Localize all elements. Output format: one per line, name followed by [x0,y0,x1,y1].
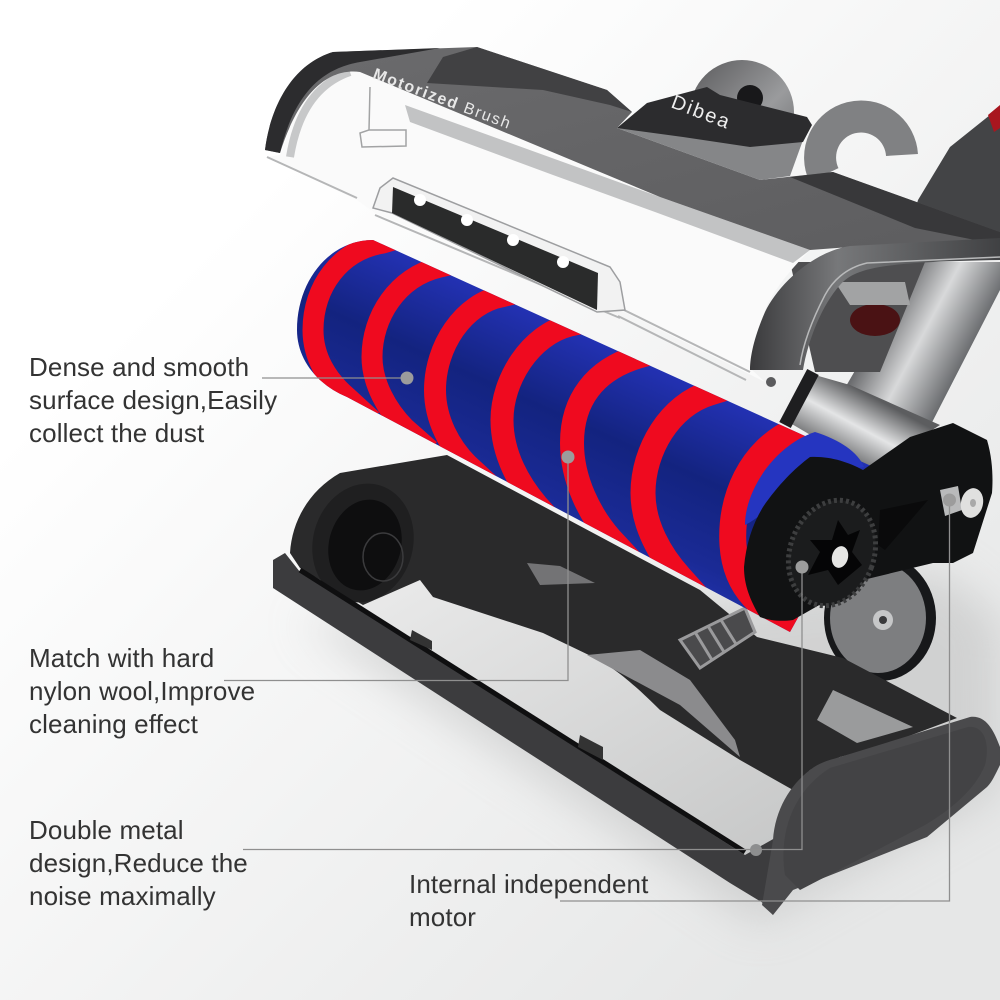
callout: double metal [29,815,248,911]
logo plate [617,87,812,147]
dark right panel [790,172,1000,245]
motor cylinder [785,372,940,470]
callout: double metal: noise maximally [29,881,216,911]
callout: dense surface: collect the dust [29,418,204,448]
arch of cover [290,72,350,157]
internal mechanism behind cover [790,262,925,372]
window rail lines [267,157,750,380]
vacuum tube upper [905,105,1000,245]
leader lines [224,378,950,901]
shiny reflections on tray [527,563,913,757]
callout: dense surface [29,352,277,448]
callout: double metal: design,Reduce the [29,848,248,878]
soft floor shadow [300,570,1000,925]
roller [297,240,870,632]
joint hook [820,116,902,175]
callout: nylon wool [29,643,255,739]
gear [774,488,890,618]
logo plate: Dibea [668,91,734,134]
tray inner body [290,455,957,790]
front arm of cover [750,238,1000,387]
callout: nylon wool: Match with hard [29,643,214,673]
right end cap of tray [762,717,1000,915]
LED strip [373,178,625,312]
clip inside window [360,87,406,147]
callout: double metal: Double metal [29,815,184,845]
callout: dense surface: surface design,Easily [29,385,277,415]
leader dots [400,372,956,574]
wiring seen through the cover [405,105,810,263]
callout: nylon wool: cleaning effect [29,709,198,739]
top cover body band [265,47,1000,250]
roller end fold blue [745,432,864,525]
black end cap arm [744,423,992,621]
callout: nylon wool: nylon wool,Improve [29,676,255,706]
callout: internal motor [409,869,648,932]
silver ramp below logo plate [617,125,803,180]
dark arch [265,48,440,153]
floor seen through the tray [300,560,800,855]
model label on cover: Motorized Brush [371,66,512,133]
spring [680,608,755,668]
left vent wheel [299,472,427,614]
transparent window of top cover [267,69,810,382]
front tray rail [273,553,775,915]
joint disc with hole [690,60,794,164]
arm opening and bolt [878,486,986,550]
vacuum tube lower [838,262,1000,436]
callout: internal motor: motor [409,902,476,932]
dark upper panel [427,47,632,112]
callout: dense surface: Dense and smooth [29,352,249,382]
rear wheel [824,555,936,681]
callout: internal motor: Internal independent [409,869,648,899]
roller red stripes [313,232,835,632]
